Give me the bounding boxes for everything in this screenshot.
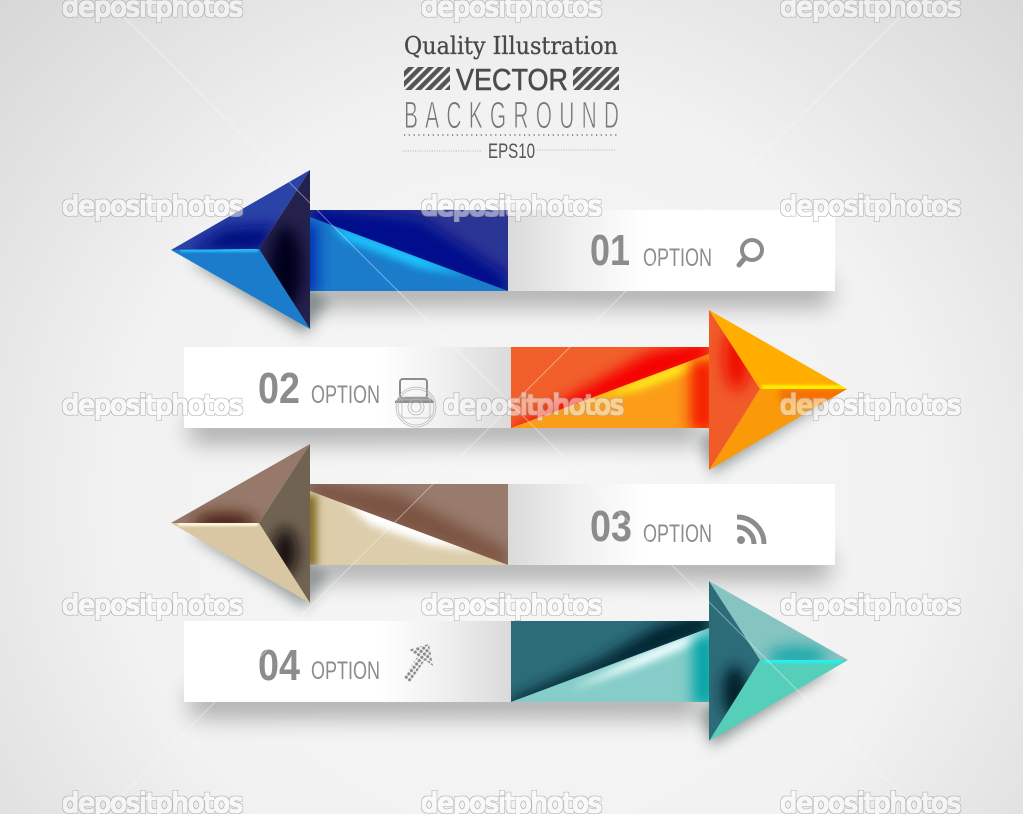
label: 04 OPTION: OPTION bbox=[311, 657, 380, 685]
option 04 row bbox=[184, 581, 848, 746]
arrow shaft bbox=[310, 484, 508, 565]
watermark: depositphotos: depositphotos bbox=[443, 390, 624, 421]
option 02 row bbox=[184, 310, 850, 474]
label: 01 OPTION: 01 bbox=[590, 226, 630, 275]
stripe block left bbox=[404, 67, 450, 90]
watermark: depositphotos: depositphotos bbox=[780, 390, 961, 421]
watermark: depositphotos: depositphotos bbox=[62, 390, 243, 421]
option card bbox=[508, 210, 835, 291]
watermark: depositphotos: depositphotos bbox=[421, 590, 602, 621]
stripe block right bbox=[573, 67, 619, 90]
shadow bbox=[190, 392, 832, 474]
label: 04 OPTION bbox=[258, 641, 380, 690]
label: 02 OPTION: OPTION bbox=[311, 381, 380, 409]
icon: dotted arrow bbox=[403, 644, 433, 682]
option labels bbox=[258, 226, 764, 690]
label: 03 OPTION: OPTION bbox=[643, 520, 712, 548]
watermark: depositphotos: depositphotos bbox=[62, 191, 243, 222]
label: 01 OPTION: OPTION bbox=[643, 244, 712, 272]
watermark: depositphotos: depositphotos bbox=[780, 191, 961, 222]
label: 03 OPTION: 03 bbox=[590, 502, 632, 551]
label: 01 OPTION bbox=[590, 226, 712, 275]
arrow shaft bbox=[310, 210, 508, 291]
light rays bbox=[103, 0, 921, 814]
label: 02 OPTION: 02 bbox=[258, 364, 300, 413]
option card bbox=[184, 621, 511, 702]
shadow bbox=[190, 528, 830, 608]
watermark: depositphotos: depositphotos bbox=[62, 590, 243, 621]
icon: laptop bbox=[395, 379, 434, 402]
arrow head bbox=[171, 170, 310, 329]
shadow bbox=[190, 664, 832, 746]
label: EPS10: EPS10 bbox=[488, 140, 535, 163]
dotted rule right bbox=[537, 149, 616, 151]
heading: BACKGROUND: BACKGROUND bbox=[404, 95, 619, 137]
arrow head bbox=[709, 581, 848, 741]
label: 02 OPTION bbox=[258, 364, 380, 413]
dotted rule left bbox=[403, 150, 482, 152]
arrow shaft bbox=[511, 347, 709, 428]
arrow head bbox=[171, 444, 310, 603]
label: 04 OPTION: 04 bbox=[258, 641, 300, 690]
option card bbox=[508, 484, 835, 565]
option 03 row bbox=[171, 444, 835, 608]
option 01 row bbox=[171, 170, 835, 334]
heading: VECTOR: VECTOR bbox=[456, 62, 568, 97]
title block bbox=[403, 32, 619, 163]
arrow shaft bbox=[511, 621, 709, 702]
option card bbox=[184, 347, 511, 428]
watermark: depositphotos: depositphotos bbox=[421, 191, 602, 222]
icon: rss feed bbox=[737, 517, 764, 544]
dotted rule bbox=[404, 134, 618, 136]
label: 03 OPTION bbox=[590, 502, 712, 551]
icon: magnifier bbox=[739, 240, 762, 265]
icon: watermark camera bbox=[396, 387, 436, 427]
watermark: depositphotos: depositphotos bbox=[780, 590, 961, 621]
shadow bbox=[190, 255, 830, 334]
title: Quality Illustration: Quality Illustration bbox=[404, 32, 618, 60]
arrow head bbox=[709, 310, 850, 470]
